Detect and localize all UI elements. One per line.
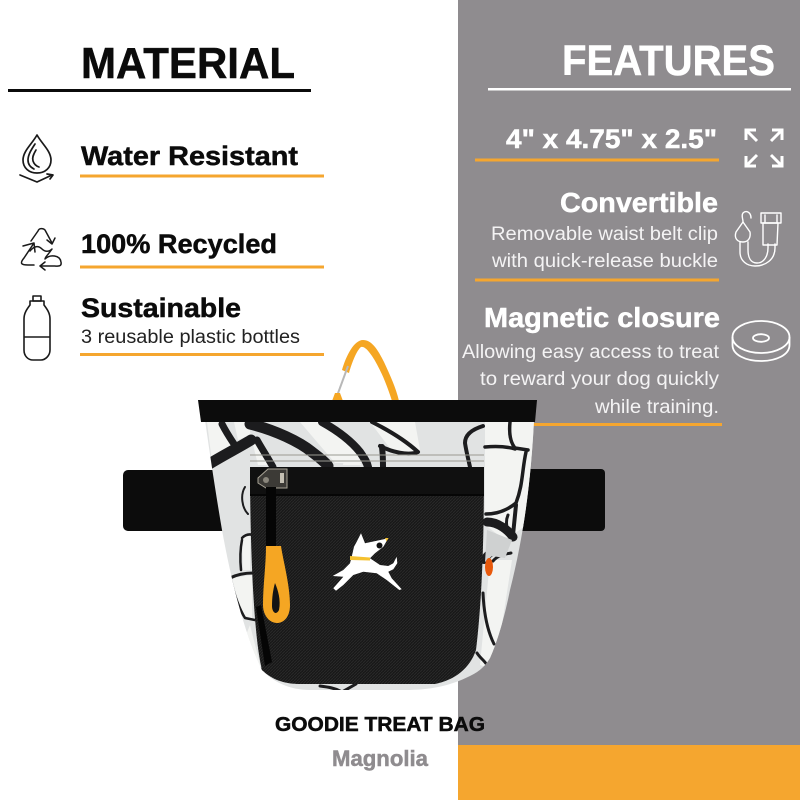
item: water resistant: Water Resistant xyxy=(81,141,298,171)
item: magnetic closure: Allowing easy access to treat xyxy=(462,342,720,363)
heading: features: FEATURES xyxy=(562,37,775,85)
item: dimensions xyxy=(475,124,719,162)
icon: bottle xyxy=(24,296,50,360)
item: convertible: Convertible xyxy=(560,187,718,218)
item: magnetic closure: Magnetic closure xyxy=(484,302,720,333)
stitching xyxy=(250,455,484,461)
bag body xyxy=(205,420,534,690)
panel: features background xyxy=(458,0,800,745)
waist strap right xyxy=(505,469,605,531)
grey lower right patch xyxy=(485,530,512,562)
item: water resistant xyxy=(80,141,324,178)
item: convertible: with quick-release buckle xyxy=(491,251,718,272)
item: recycled: 100% Recycled xyxy=(81,229,277,259)
product name: GOODIE TREAT BAG xyxy=(275,714,485,736)
white fabric areas xyxy=(207,422,534,672)
item: recycled xyxy=(80,229,324,268)
waist strap left xyxy=(123,470,233,531)
icon: magnet disk xyxy=(732,321,790,361)
logo: running dog xyxy=(333,533,402,591)
item: magnetic closure xyxy=(462,302,722,426)
rim binding xyxy=(198,400,537,422)
icon: belt clip xyxy=(735,212,781,266)
orange footer block xyxy=(458,745,800,800)
product: treat bag xyxy=(123,340,605,692)
icon: expand arrows xyxy=(746,130,782,166)
panel: features xyxy=(462,37,791,426)
fabric pattern xyxy=(206,422,534,692)
item: sustainable: Sustainable xyxy=(81,293,241,323)
icon: water drop xyxy=(20,135,53,182)
item: sustainable: 3 reusable plastic bottles xyxy=(81,327,300,348)
colour name: Magnolia xyxy=(332,746,429,771)
item: sustainable xyxy=(80,293,324,356)
orange accent xyxy=(485,558,493,576)
zipper pull xyxy=(256,469,290,666)
item: convertible xyxy=(475,187,719,282)
icon: recycling waves xyxy=(21,229,61,270)
carabiner xyxy=(332,340,399,401)
item: magnetic closure: to reward your dog quickly xyxy=(480,369,720,390)
item: magnetic closure: while training. xyxy=(594,397,719,418)
heading: material xyxy=(8,39,311,92)
pocket zipper band xyxy=(250,467,484,495)
item: convertible: Removable waist belt clip xyxy=(491,224,718,245)
item: dimensions: 4" x 4.75" x 2.5" xyxy=(506,124,717,154)
caption xyxy=(275,714,485,771)
front pocket xyxy=(250,467,484,684)
black branches xyxy=(206,422,528,692)
heading: material: MATERIAL xyxy=(81,39,295,88)
panel: material xyxy=(8,39,324,360)
